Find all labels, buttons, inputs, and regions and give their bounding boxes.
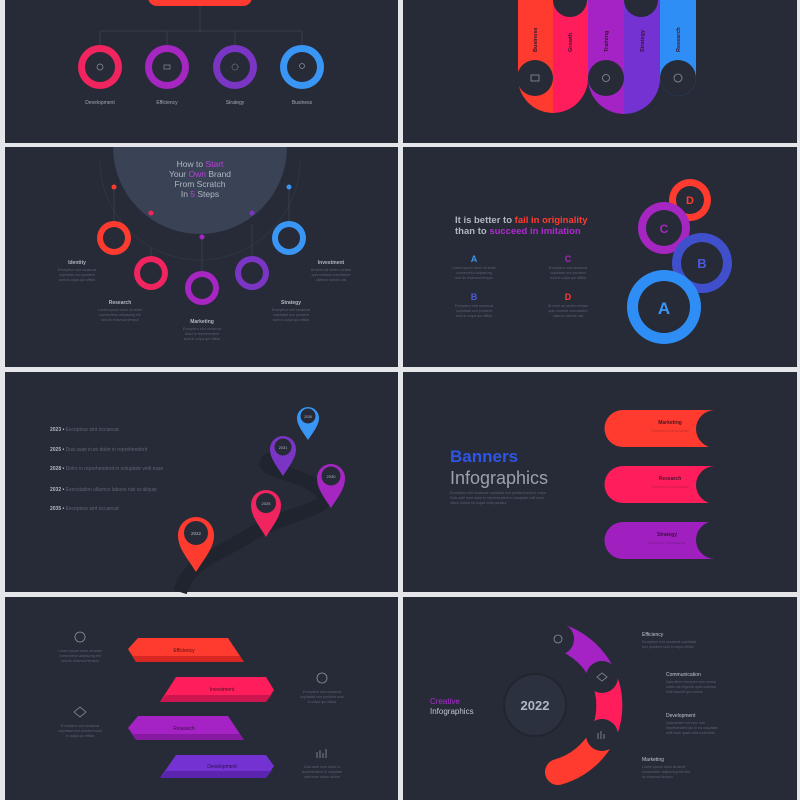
- panel: banners: [403, 372, 797, 592]
- panel: 2022 arc: reprehenderit qui in ea voluptate: [666, 726, 718, 730]
- panel: 2022 arc: Quis autem vel eum iure: [666, 721, 705, 725]
- circle: strategy: Strategy: [226, 100, 245, 106]
- panel: five steps: dolor in reprehenderit: [185, 332, 219, 336]
- panel: 2022 arc: do eiusmod tempor: [642, 775, 674, 779]
- panel: ABCD quote: ullamco laboris nisi: [553, 314, 583, 318]
- icon circles: [483, 0, 696, 96]
- quote: than to succeed in imitation: [455, 226, 581, 237]
- step labels: Strategy: [281, 300, 301, 306]
- circle: efficiency: Efficiency: [156, 100, 178, 106]
- title: In 5 Steps: [181, 189, 219, 199]
- panel: five steps: ullamco laboris nisi: [316, 278, 346, 282]
- panel: five steps: Excepteur sint occaecat: [183, 327, 221, 331]
- panel: five steps: Ut enim ad minim veniam: [311, 268, 351, 272]
- panel: ABCD quote: D: [565, 292, 572, 302]
- panel: parallelograms: consectetur adipiscing elit: [59, 654, 101, 658]
- panel: ABCD quote: Excepteur sint occaecat: [549, 266, 587, 270]
- panel: 2022 arc: Marketing: [642, 757, 664, 763]
- circle: development: [78, 45, 122, 106]
- pins: [178, 517, 214, 572]
- panel: 2022 arc: Development: [666, 713, 696, 719]
- panel: 2022 arc: [403, 597, 797, 800]
- panel: parallelograms: Lorem ipsum dolor sit amet: [58, 649, 102, 653]
- banner: research: Excepteur sint occaecat: [651, 485, 689, 489]
- ribbon labels: Training: [604, 31, 610, 52]
- panel: ABCD quote: sed do eiusmod tempor: [455, 276, 494, 280]
- title: [169, 159, 231, 199]
- 2022 circle: [504, 674, 566, 736]
- step labels: Identity: [68, 260, 86, 266]
- banner: strategy: Strategy: [657, 532, 677, 538]
- quote: It is better to fail in originality: [455, 215, 588, 226]
- panel: timeline pins: 2028 • Dolor in reprehenderit in voluptate velit esse: [50, 466, 163, 472]
- panel: 2022 arc: Lorem ipsum dolor sit amet: [642, 765, 685, 769]
- panel: ABCD quote: Ut enim ad minim veniam: [548, 304, 588, 308]
- panel: timeline pins: 2035 • Excepteur sint occaecat: [50, 506, 119, 512]
- panel: ABCD quote: A: [471, 254, 478, 264]
- heading: Banners: [450, 447, 518, 466]
- panel: ABCD quote: cupidatat non proident: [550, 271, 586, 275]
- circle: business: [280, 45, 324, 106]
- title: From Scratch: [174, 179, 226, 189]
- panel: ABCD quote: C: [565, 254, 572, 264]
- panel: parallelograms: cupidatat non proident sunt: [300, 695, 344, 699]
- panel: 2022 arc: Communication: [666, 672, 701, 678]
- panel: 2022 arc: nihil impedit quo minus: [666, 690, 703, 694]
- panel: parallelograms: sed do eiusmod tempor: [61, 659, 100, 663]
- panel: ABCD quote: sunt in culpa qui officia: [550, 276, 586, 280]
- panel: five steps: sunt in culpa qui officia: [59, 278, 95, 282]
- panel: timeline pins: 2025 • Duis aute irure dolor in reprehenderit: [50, 447, 148, 453]
- panel: ABCD quote: [403, 147, 797, 367]
- panel: vertical ribbons: [403, 0, 797, 143]
- panel: timeline pins: 2025: [262, 501, 271, 506]
- quote: [455, 215, 588, 237]
- circle: business: Business: [292, 100, 313, 106]
- title: How to Start: [177, 159, 224, 169]
- panel: five steps: sed do eiusmod tempor: [101, 318, 140, 322]
- shape: investment: [160, 677, 274, 702]
- panel: ABCD quote: consectetur adipiscing: [456, 271, 492, 275]
- panel: five steps: sunt in culpa qui officia: [184, 337, 220, 341]
- panel: timeline pins: [5, 372, 398, 592]
- ribbon labels: Growth: [568, 32, 574, 52]
- panel: five steps: cupidatat non proident: [59, 273, 95, 277]
- panel: parallelograms: Excepteur sint occaecat: [303, 690, 341, 694]
- pins: 2022: [191, 531, 202, 536]
- ribbon labels: [533, 27, 682, 52]
- panel: 2022 arc: Efficiency: [642, 632, 664, 638]
- banner: strategy: [605, 521, 734, 559]
- shape: efficiency: Efficiency: [173, 648, 195, 654]
- shape: development: Development: [207, 764, 237, 770]
- panel: five steps: [5, 147, 398, 367]
- banner: research: [605, 466, 734, 504]
- shape: research: Research: [173, 726, 195, 732]
- panel: ABCD quote: Lorem ipsum dolor sit amet: [452, 266, 496, 270]
- panel: ABCD quote: Excepteur sint occaecat: [455, 304, 493, 308]
- panel: ABCD quote: A: [658, 299, 670, 318]
- panel: timeline pins: 2023 • Excepteur sint occaecat: [50, 427, 119, 433]
- panel: parallelograms: cupidatat non proident sunt: [58, 729, 102, 733]
- panel: five steps: quis nostrud exercitation: [312, 273, 350, 277]
- panel: five steps: Lorem ipsum dolor sit amet: [98, 308, 142, 312]
- shape: investment: Investment: [210, 687, 235, 693]
- circles: D: [686, 195, 694, 207]
- 2022 circle: 2022: [521, 698, 549, 713]
- panel: banners: Excepteur sint occaecat cupidatat non proident sunt in culpa: [450, 491, 546, 495]
- panel: parallelograms: in culpa qui officia: [66, 734, 94, 738]
- banner: marketing: Marketing: [658, 420, 682, 426]
- panel: parallelograms: Duis aute irure dolor in: [304, 765, 340, 769]
- arc band: [558, 637, 609, 772]
- panel: 2022 arc: Creative: [430, 697, 460, 706]
- panel: parallelograms: Excepteur sint occaecat: [61, 724, 99, 728]
- panel: ABCD quote: B: [471, 292, 478, 302]
- panel: ABCD quote: sunt in culpa qui officia: [456, 314, 492, 318]
- shape: efficiency: [128, 638, 244, 662]
- title: Your Own Brand: [169, 169, 231, 179]
- panel: five steps: cupidatat non proident: [273, 313, 309, 317]
- circles: [669, 179, 711, 221]
- panel: 2022 arc: consectetur adipiscing elit sed: [642, 770, 690, 774]
- banner: strategy: Excepteur sint occaecat: [648, 541, 686, 545]
- ribbon labels: Business: [533, 28, 539, 52]
- panel: timeline pins: 2030: [327, 474, 336, 479]
- panel: five steps: consectetur adipiscing elit: [99, 313, 141, 317]
- panel: parallelograms: velit esse cillum dolore: [304, 775, 340, 779]
- panel: five steps: Excepteur sint occaecat: [58, 268, 96, 272]
- panel: timeline pins: 2032 • Exercitation ullamco laboris nisi ut aliquip: [50, 487, 157, 493]
- panel: five steps: sunt in culpa qui officia: [273, 318, 309, 322]
- top red box: [148, 0, 252, 6]
- panel: 2022 arc: Excepteur sint occaecat cupidatat: [642, 640, 696, 644]
- banner: research: Research: [659, 476, 681, 482]
- circle: efficiency: [145, 45, 189, 106]
- panel: timeline pins: 2031: [279, 446, 287, 450]
- panel: ABCD quote: cupidatat non proident: [456, 309, 492, 313]
- panel: 2022 arc: velit esse quam nihil molestiae: [666, 731, 715, 735]
- ribbon labels: Research: [676, 27, 682, 52]
- step labels: [68, 260, 345, 325]
- panel: parallelograms: [5, 597, 398, 800]
- panel: ABCD quote: B: [697, 256, 707, 271]
- shape: research: [128, 716, 244, 740]
- panel: ABCD quote: C: [660, 222, 669, 236]
- panel: parallelograms: reprehenderit in voluptate: [302, 770, 342, 774]
- ribbon labels: Strategy: [640, 29, 646, 52]
- shape: development: [160, 755, 274, 778]
- panel: banners: Infographics: [450, 468, 548, 488]
- panel: hierarchy circles: [5, 0, 398, 143]
- panel: parallelograms: in culpa qui officia: [308, 700, 336, 704]
- circle: strategy: [213, 45, 257, 106]
- panel: 2022 arc: nobis est eligendi optio cumque: [666, 685, 716, 689]
- step labels: Investment: [318, 260, 345, 266]
- panel: 2022 arc: Infographics: [430, 707, 474, 716]
- panel: 2022 arc: non proident sunt in culpa officia: [642, 645, 693, 649]
- panel: banners: Duis aute irure dolor in reprehenderit in voluptate velit esse: [450, 496, 544, 500]
- step labels: Research: [109, 300, 131, 306]
- circle: development: Development: [85, 100, 115, 106]
- panel: timeline pins: 2035: [304, 415, 312, 419]
- step labels: Marketing: [190, 319, 214, 325]
- panel: ABCD quote: quis nostrud exercitation: [549, 309, 587, 313]
- panel: five steps: Excepteur sint occaecat: [272, 308, 310, 312]
- banner: marketing: Excepteur sint occaecat: [651, 429, 689, 433]
- panel: 2022 arc: Nam libero tempore cum soluta: [666, 680, 716, 684]
- banner: marketing: [605, 410, 734, 448]
- panel: banners: cillum dolore eu fugiat nulla pariatur: [450, 501, 508, 505]
